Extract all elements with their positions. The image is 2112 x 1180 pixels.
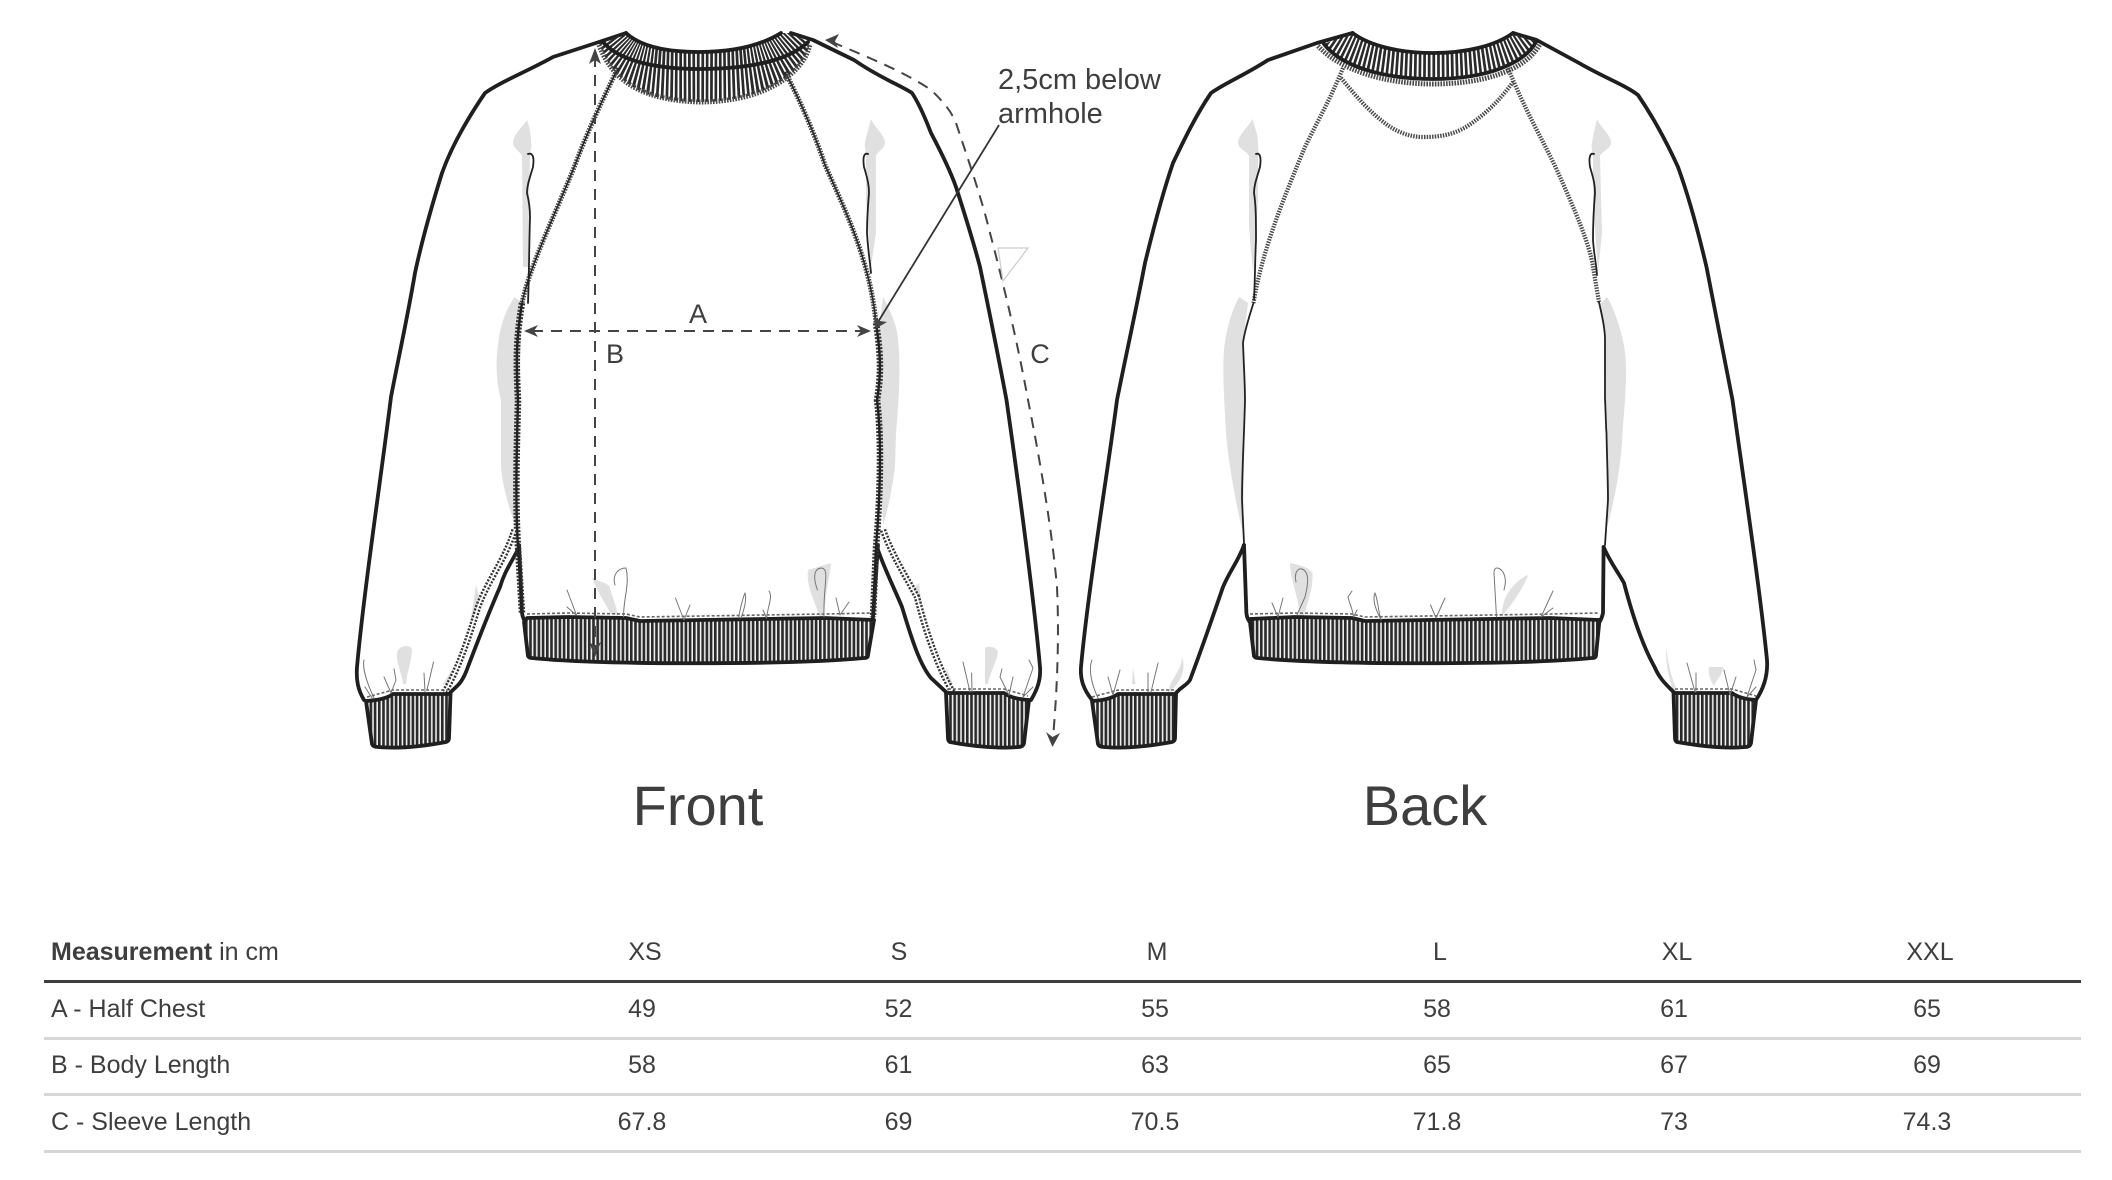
header row: M — [1147, 938, 1167, 966]
row: B - Body Length: 69 — [1913, 1051, 1941, 1079]
row: C - Sleeve Length: 71.8 — [1413, 1108, 1461, 1136]
header rule — [44, 980, 2081, 983]
front left underarm line — [450, 547, 519, 693]
label B: B — [606, 339, 624, 369]
row: C - Sleeve Length: 70.5 — [1131, 1108, 1179, 1136]
small triangle mark — [998, 248, 1028, 281]
back fold shadows — [1132, 119, 1723, 692]
row: C - Sleeve Length — [51, 1108, 1951, 1136]
label A: A — [689, 299, 707, 329]
front sweatshirt drawing — [357, 33, 1040, 748]
row rule 3 — [44, 1150, 2081, 1153]
dimension A arrow — [524, 325, 871, 337]
row: C - Sleeve Length: 69 — [885, 1108, 912, 1136]
front left cuff ribbing — [366, 694, 450, 748]
dimension C arrow — [825, 34, 1060, 747]
back left underarm line — [1176, 545, 1244, 693]
label C: C — [1030, 339, 1050, 369]
row: B - Body Length: 58 — [628, 1051, 656, 1079]
back right underarm line — [1604, 547, 1674, 692]
header row: XS — [628, 938, 662, 966]
row: A - Half Chest: 61 — [1660, 995, 1688, 1023]
back left cuff ribbing — [1092, 694, 1176, 748]
title: Back: Back — [1363, 774, 1488, 837]
back right sleeve outline — [1513, 33, 1767, 700]
row: B - Body Length — [51, 1051, 1941, 1079]
front wrinkle lines — [364, 568, 1033, 698]
front right sleeve outline — [791, 33, 1040, 700]
header row: S — [891, 938, 907, 966]
row: A - Half Chest: 58 — [1423, 995, 1451, 1023]
row: A - Half Chest: 49 — [628, 995, 656, 1023]
front fold shadows — [397, 119, 998, 686]
front rib stitching — [367, 613, 1028, 697]
row: A - Half Chest: A - Half Chest — [51, 995, 205, 1023]
front body side lines — [519, 545, 878, 624]
annotation: 2,5cm below armhole: 2,5cm below — [998, 64, 1162, 96]
front right cuff ribbing — [946, 693, 1029, 748]
row: C - Sleeve Length: 73 — [1660, 1108, 1688, 1136]
row: A - Half Chest — [51, 995, 1941, 1023]
back right cuff ribbing — [1674, 693, 1756, 748]
header row: L — [1433, 938, 1447, 966]
back rib stitching — [1092, 613, 1756, 697]
back wrinkle lines — [1090, 568, 1756, 698]
front body seams — [444, 68, 953, 693]
row: B - Body Length: 65 — [1423, 1051, 1451, 1079]
row: B - Body Length: 67 — [1660, 1051, 1688, 1079]
front left sleeve outline — [357, 33, 626, 700]
row: B - Body Length: 61 — [885, 1051, 912, 1079]
front collar — [596, 33, 812, 102]
front right underarm line — [878, 550, 946, 692]
title: Front: Front — [633, 774, 764, 837]
row: C - Sleeve Length: 67.8 — [618, 1108, 666, 1136]
row: C - Sleeve Length: 74.3 — [1903, 1108, 1951, 1136]
row rule 2 — [44, 1093, 2081, 1096]
annotation: 2,5cm below armhole: armhole — [998, 98, 1103, 130]
back body seams — [1242, 68, 1608, 545]
row: A - Half Chest: 52 — [885, 995, 912, 1023]
row: C - Sleeve Length: C - Sleeve Length — [51, 1108, 251, 1136]
header row: XL — [1662, 938, 1692, 966]
row rule 1 — [44, 1037, 2081, 1040]
row: B - Body Length: 63 — [1141, 1051, 1169, 1079]
front hem ribbing — [524, 617, 874, 663]
header row — [51, 938, 1954, 966]
dimension B arrow — [589, 48, 601, 657]
back left sleeve outline — [1081, 33, 1353, 700]
row: A - Half Chest: 55 — [1141, 995, 1169, 1023]
back sweatshirt drawing — [1081, 33, 1767, 748]
back collar — [1318, 33, 1540, 84]
back body side lines — [1244, 545, 1604, 622]
header row: Measurement in cm — [51, 938, 279, 966]
row: B - Body Length: B - Body Length — [51, 1051, 230, 1079]
header row: XXL — [1906, 938, 1954, 966]
back hem ribbing — [1250, 617, 1600, 663]
leader arrow to armhole — [874, 125, 999, 329]
row: A - Half Chest: 65 — [1913, 995, 1941, 1023]
size table — [44, 938, 2081, 1153]
